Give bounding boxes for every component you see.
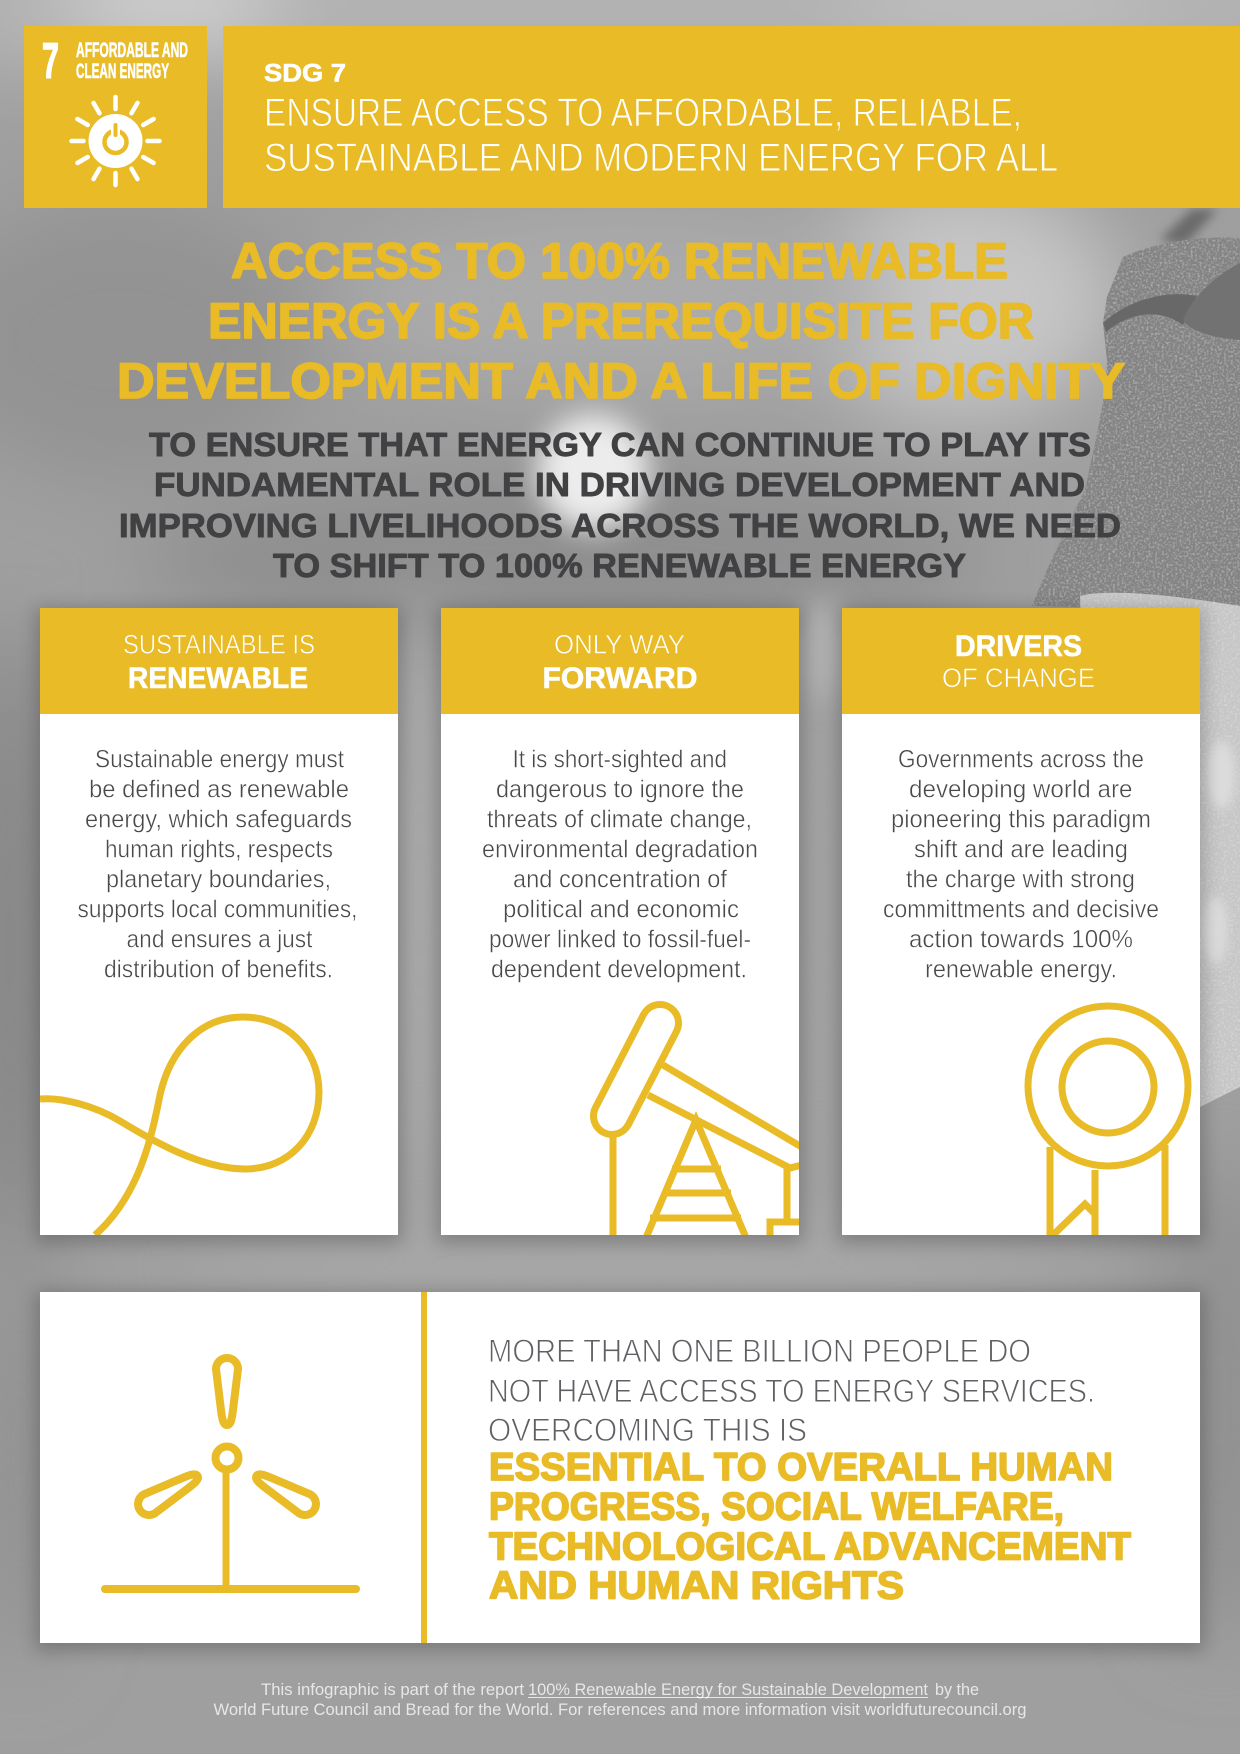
card header: RENEWABLE bbox=[128, 662, 308, 695]
text block: subtitle bbox=[119, 426, 1121, 584]
callout intro text: MORE THAN ONE BILLION PEOPLE DO bbox=[488, 1333, 1031, 1369]
card body text: power linked to fossil-fuel- bbox=[489, 926, 751, 954]
card body text: pioneering this paradigm bbox=[891, 806, 1151, 834]
card body text: human rights, respects bbox=[105, 836, 333, 864]
footer credits: by the bbox=[935, 1680, 979, 1699]
icon: infinity loop bbox=[40, 1017, 319, 1235]
card shadows bbox=[36, 608, 1204, 1651]
panel: sustainable is renewable bbox=[40, 608, 398, 1235]
text block: subtitle: IMPROVING LIVELIHOODS ACROSS THE WORLD, WE NEED bbox=[119, 507, 1121, 544]
text block: subtitle: FUNDAMENTAL ROLE IN DRIVING DEVELOPMENT AND bbox=[154, 466, 1085, 503]
card body text: supports local communities, bbox=[78, 896, 358, 924]
callout emphasis text: AND HUMAN RIGHTS bbox=[489, 1564, 904, 1608]
card header: SUSTAINABLE IS bbox=[123, 630, 315, 660]
banner goal statement: SUSTAINABLE AND MODERN ENERGY FOR ALL bbox=[264, 136, 1058, 180]
card body text: environmental degradation bbox=[482, 836, 758, 864]
icon: wind turbine bbox=[105, 1358, 356, 1589]
card body text: Governments across the bbox=[898, 746, 1144, 774]
card body text: It is short-sighted and bbox=[512, 746, 727, 774]
card body text: be defined as renewable bbox=[89, 776, 349, 804]
icon: oil pumpjack bbox=[612, 1023, 810, 1240]
card body text: dependent development. bbox=[491, 956, 747, 984]
card body text: planetary boundaries, bbox=[106, 866, 331, 894]
card body text bbox=[78, 746, 358, 984]
panel: only way forward bbox=[441, 608, 810, 1240]
banner label: SDG 7 bbox=[264, 60, 346, 88]
card header bbox=[441, 608, 799, 714]
callout intro text: OVERCOMING THIS IS bbox=[488, 1412, 807, 1448]
callout emphasis text: ESSENTIAL TO OVERALL HUMAN bbox=[489, 1446, 1113, 1489]
heading: main title bbox=[117, 233, 1125, 409]
callout intro text: NOT HAVE ACCESS TO ENERGY SERVICES. bbox=[488, 1373, 1095, 1409]
card body text: renewable energy. bbox=[925, 956, 1117, 984]
heading: main title: DEVELOPMENT AND A LIFE OF DIGNITY bbox=[117, 353, 1125, 409]
card body text: distribution of benefits. bbox=[104, 956, 333, 984]
card header bbox=[842, 608, 1200, 714]
card body text: committments and decisive bbox=[883, 896, 1159, 924]
icon: award rosette bbox=[1028, 1006, 1188, 1240]
card header bbox=[40, 608, 398, 714]
heading: main title: ENERGY IS A PREREQUISITE FOR bbox=[208, 293, 1034, 349]
text block: subtitle: TO ENSURE THAT ENERGY CAN CONTINUE TO PLAY ITS bbox=[149, 426, 1091, 463]
panel: SDG 7 square badge bbox=[24, 26, 207, 208]
card header: DRIVERS bbox=[955, 630, 1082, 663]
footer credits: 100% Renewable Energy for Sustainable Development bbox=[528, 1680, 928, 1699]
card body text: threats of climate change, bbox=[487, 806, 752, 834]
card body text: and ensures a just bbox=[126, 926, 313, 954]
card header: ONLY WAY bbox=[554, 630, 685, 660]
card header: OF CHANGE bbox=[942, 663, 1095, 693]
icon: sun with power symbol bbox=[72, 97, 160, 185]
card body text: developing world are bbox=[909, 776, 1132, 804]
badge label bbox=[76, 39, 188, 83]
card body text: dangerous to ignore the bbox=[496, 776, 744, 804]
card body text bbox=[482, 746, 758, 984]
banner goal statement bbox=[264, 91, 1058, 180]
footer credits bbox=[214, 1680, 1026, 1719]
card body text: the charge with strong bbox=[906, 866, 1135, 894]
footer credits: This infographic is part of the report bbox=[261, 1680, 524, 1699]
text block: subtitle: TO SHIFT TO 100% RENEWABLE ENERGY bbox=[273, 547, 966, 584]
heading: main title: ACCESS TO 100% RENEWABLE bbox=[231, 233, 1008, 289]
banner goal statement: ENSURE ACCESS TO AFFORDABLE, RELIABLE, bbox=[264, 91, 1022, 135]
card body text: action towards 100% bbox=[909, 926, 1133, 954]
panel: one billion people callout bbox=[40, 1292, 1200, 1643]
footer credits: World Future Council and Bread for the World. For references and more information visit worldfuturecouncil.org bbox=[214, 1700, 1026, 1719]
card body text: energy, which safeguards bbox=[85, 806, 352, 834]
card body text: Sustainable energy must bbox=[95, 746, 344, 774]
card body text: political and economic bbox=[503, 896, 739, 924]
callout intro text bbox=[488, 1333, 1095, 1448]
callout emphasis text bbox=[489, 1446, 1131, 1608]
callout emphasis text: TECHNOLOGICAL ADVANCEMENT bbox=[489, 1526, 1131, 1568]
panel: SDG 7 goal banner bbox=[223, 26, 1240, 208]
card body text: and concentration of bbox=[513, 866, 727, 894]
panel: drivers of change bbox=[842, 608, 1200, 1240]
badge number: 7 bbox=[42, 33, 59, 89]
callout emphasis text: PROGRESS, SOCIAL WELFARE, bbox=[489, 1486, 1064, 1528]
card header: FORWARD bbox=[542, 662, 698, 695]
badge label: AFFORDABLE AND bbox=[76, 39, 188, 62]
divider bbox=[421, 1292, 427, 1643]
badge label: CLEAN ENERGY bbox=[76, 60, 169, 83]
card body text bbox=[883, 746, 1159, 984]
card body text: shift and are leading bbox=[914, 836, 1128, 864]
